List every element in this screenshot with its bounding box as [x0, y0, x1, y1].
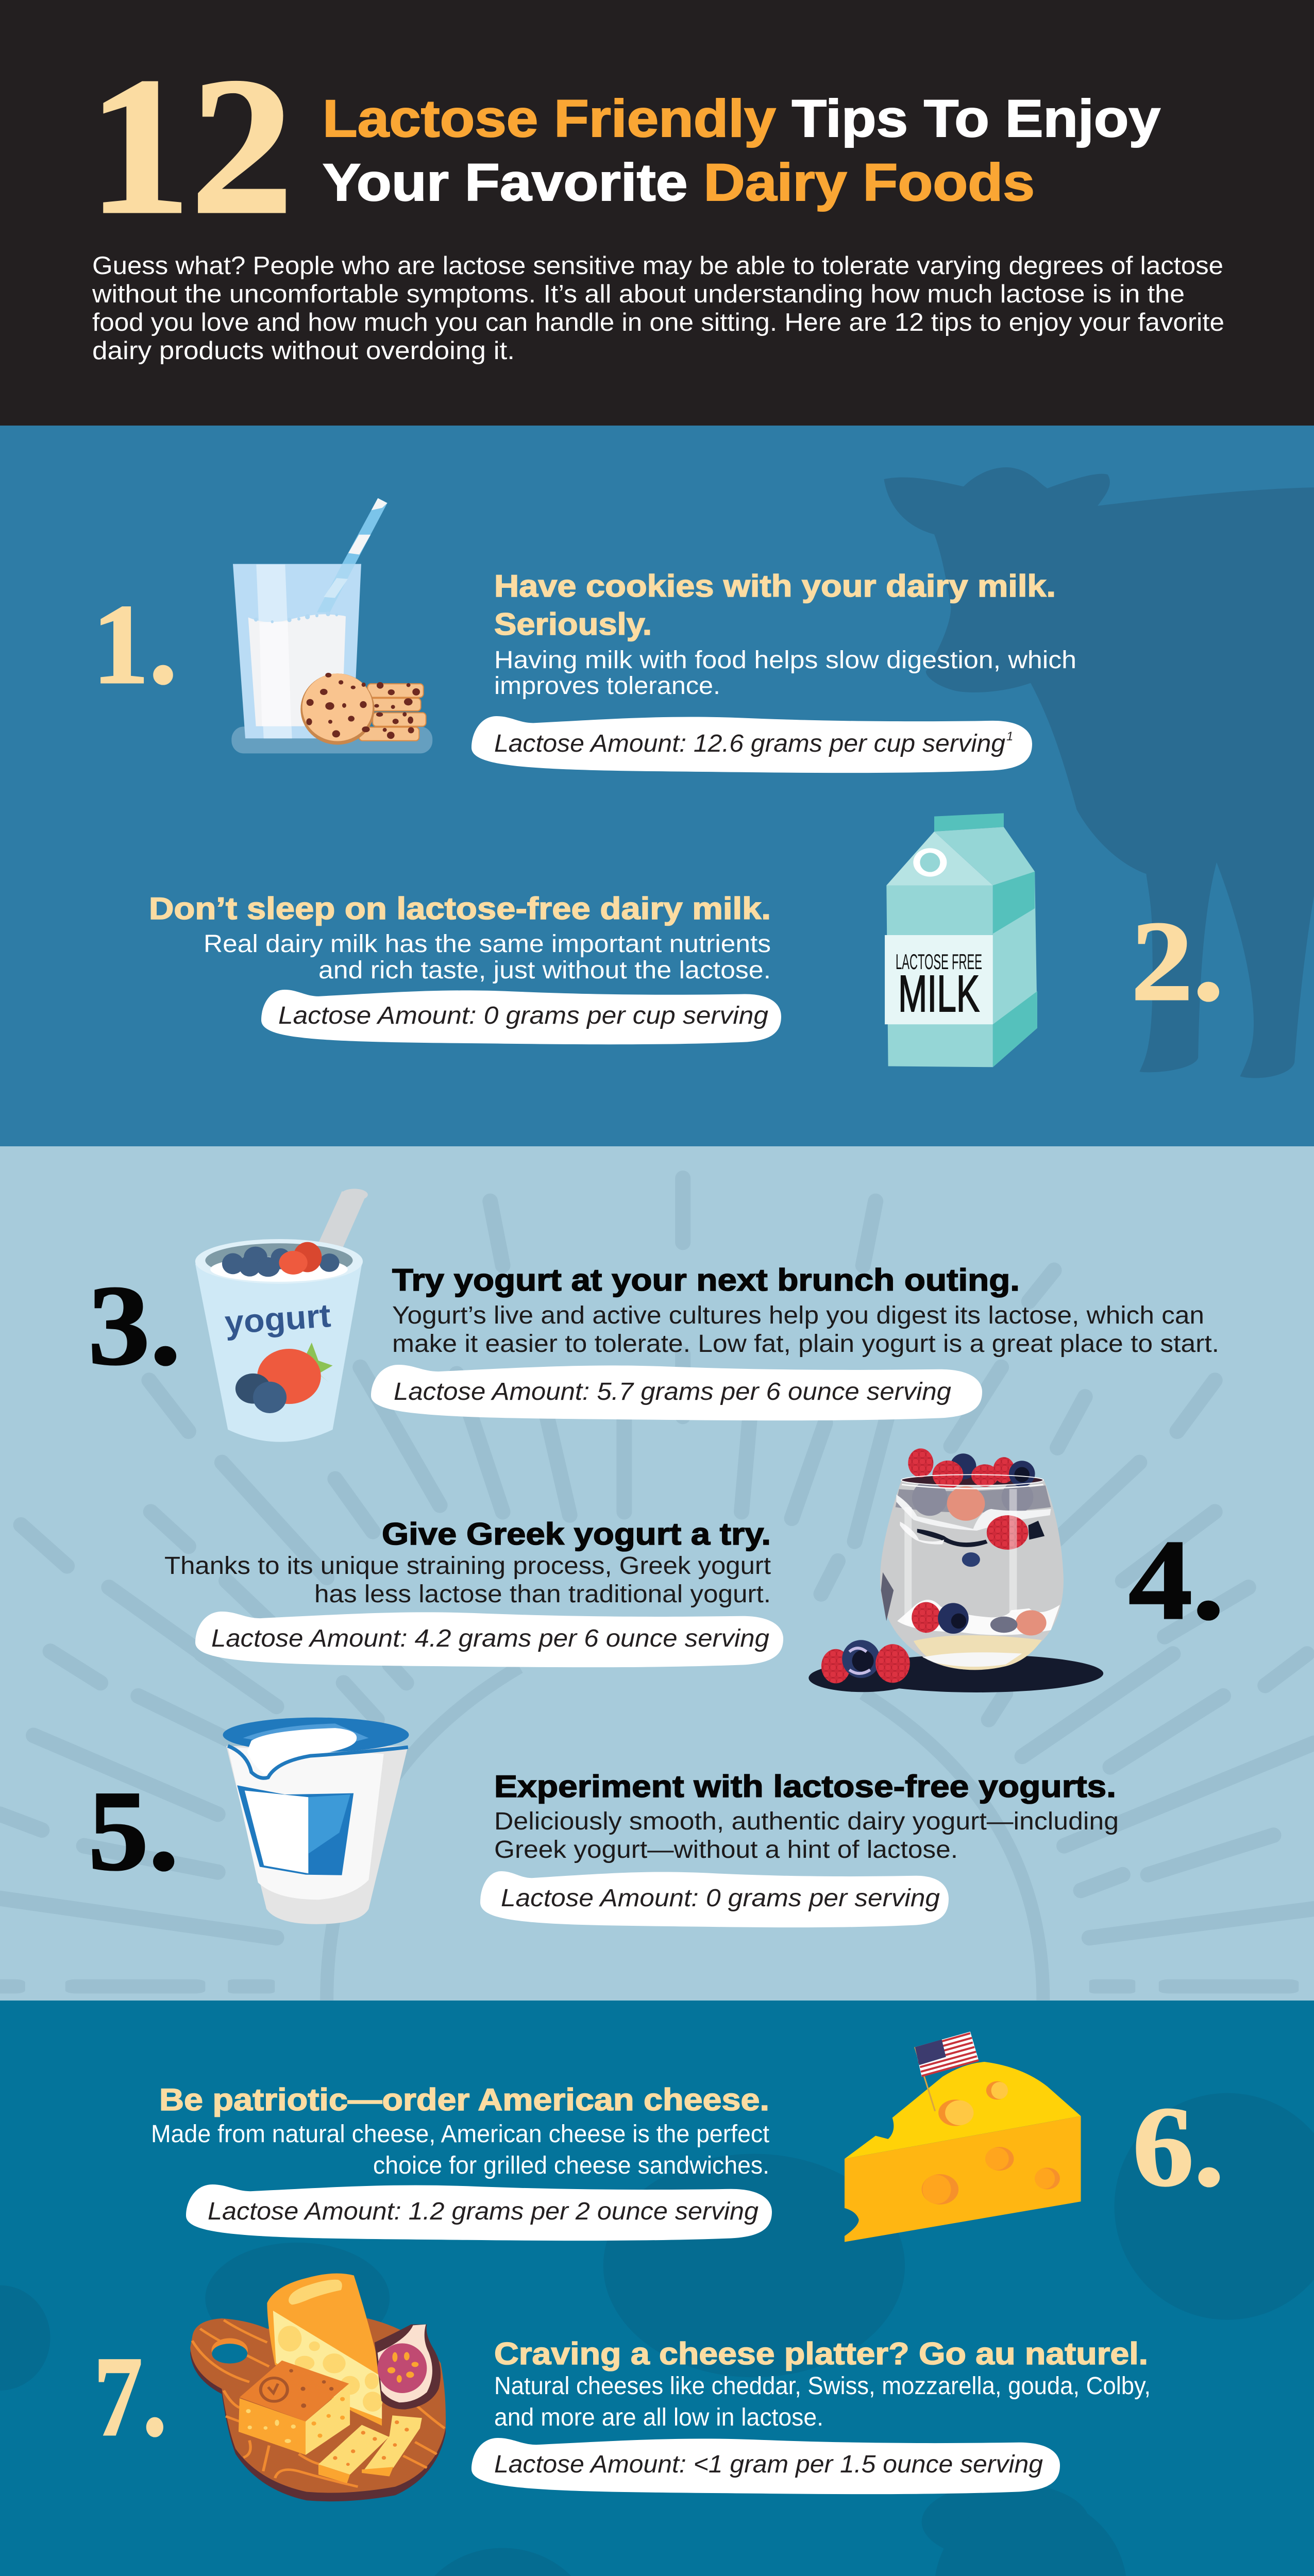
number 4: 4. [1128, 1517, 1224, 1643]
lactose amount pill: Lactose Amount: 5.7 grams per 6 ounce serving [394, 1378, 951, 1405]
icon: cheese board [190, 2274, 446, 2501]
tip 1 [92, 498, 1076, 773]
lactose amount pill: Lactose Amount: 4.2 grams per 6 ounce serving [211, 1625, 769, 1652]
icon: lactose free milk carton: LACTOSE FREE [896, 950, 982, 974]
panel: cheese [0, 2001, 1314, 2576]
lactose amount pill [471, 716, 1032, 773]
icon: yogurt cup with berries: yogurt [224, 1297, 332, 1341]
icon: lactose free milk carton: MILK [898, 965, 980, 1023]
panel: milk [0, 426, 1314, 1146]
lactose amount pill: Lactose Amount: 1.2 grams per 2 ounce serving [208, 2198, 759, 2225]
panel: yogurt [0, 1146, 1314, 2001]
number 3: 3. [88, 1262, 181, 1389]
icon: cheese wedge with flag [845, 2031, 1081, 2242]
heading: Seriously. [494, 607, 652, 641]
body text [204, 930, 771, 984]
body text: Thanks to its unique straining process, Greek yogurt [164, 1552, 771, 1580]
intro text: Guess what? People who are lactose sensitive may be able to tolerate varying degrees of lactose [92, 252, 1223, 280]
lactose amount pill [371, 1365, 982, 1420]
body text [494, 647, 1076, 700]
heading: Craving a cheese platter? Go au naturel. [494, 2336, 1148, 2371]
icon: lactose free milk carton [885, 813, 1037, 1067]
number 1: 1. [92, 581, 177, 708]
tip 2 [149, 813, 1224, 1067]
heading: Have cookies with your dairy milk. [494, 569, 1056, 603]
body text: Greek yogurt—without a hint of lactose. [494, 1836, 958, 1863]
body text: Having milk with food helps slow digestion, which [494, 647, 1076, 674]
icon: lactose free yogurt tub [223, 1718, 409, 1924]
title [323, 89, 1160, 212]
tip 3 [88, 1189, 1219, 1442]
heading: Try yogurt at your next brunch outing. [392, 1263, 1020, 1297]
number 2: 2. [1131, 898, 1224, 1025]
body text: and rich taste, just without the lactose. [318, 957, 771, 984]
icon: greek yogurt parfait [808, 1448, 1103, 1692]
body text: Real dairy milk has the same important nutrients [204, 930, 771, 958]
body text: has less lactose than traditional yogurt. [314, 1581, 771, 1608]
intro text: dairy products without overdoing it. [92, 337, 515, 365]
tip 4 [164, 1448, 1224, 1692]
lactose amount pill [186, 2184, 772, 2241]
body text: and more are all low in lactose. [494, 2404, 823, 2431]
lactose amount pill [471, 2438, 1060, 2494]
number 6: 6. [1133, 2083, 1224, 2210]
title: Your Favorite Dairy Foods [323, 153, 1035, 212]
lactose amount pill: 1 [1006, 730, 1013, 743]
big number 12: 12 [88, 38, 293, 255]
body text [494, 1808, 1119, 1863]
body text: improves tolerance. [494, 672, 720, 700]
panel: header [0, 0, 1314, 426]
heading [494, 569, 1056, 641]
body text [164, 1552, 771, 1608]
lactose amount pill: Lactose Amount: 0 grams per cup serving [278, 1002, 768, 1029]
lactose amount pill [480, 1871, 949, 1927]
lactose amount pill: Lactose Amount: 0 grams per serving [501, 1885, 940, 1912]
number 7: 7. [94, 2333, 167, 2460]
intro text: without the uncomfortable symptoms. It’s all about understanding how much lactose is in the [92, 280, 1185, 308]
tip 5 [88, 1718, 1119, 1927]
body text: Made from natural cheese, American cheese is the perfect [151, 2121, 769, 2148]
heading: Experiment with lactose-free yogurts. [494, 1769, 1116, 1804]
title: Lactose Friendly Tips To Enjoy [323, 89, 1160, 148]
lactose amount pill [195, 1612, 783, 1667]
tip 6 [151, 2031, 1224, 2242]
body text: Deliciously smooth, authentic dairy yogurt—including [494, 1808, 1119, 1835]
body text [494, 2372, 1151, 2431]
heading: Don’t sleep on lactose-free dairy milk. [149, 891, 771, 926]
lactose amount pill: Lactose Amount: <1 gram per 1.5 ounce serving [494, 2451, 1043, 2478]
icon: yogurt cup with berries [195, 1189, 368, 1442]
body text [392, 1302, 1219, 1358]
body text: Yogurt’s live and active cultures help you digest its lactose, which can [392, 1302, 1204, 1329]
body text: make it easier to tolerate. Low fat, plain yogurt is a great place to start. [392, 1330, 1219, 1358]
lactose amount pill: Lactose Amount: 12.6 grams per cup serving [494, 730, 1005, 757]
body text: Natural cheeses like cheddar, Swiss, mozzarella, gouda, Colby, [494, 2372, 1151, 2400]
icon: glass of milk with cookies [231, 498, 432, 753]
lactose amount pill [261, 990, 781, 1044]
cow silhouette [884, 467, 1314, 1078]
number 5: 5. [88, 1768, 179, 1894]
intro text [92, 252, 1224, 365]
heading: Give Greek yogurt a try. [382, 1517, 771, 1551]
heading: Be patriotic—order American cheese. [159, 2082, 769, 2117]
tip 7 [94, 2274, 1151, 2501]
body text: choice for grilled cheese sandwiches. [373, 2152, 769, 2179]
body text [151, 2121, 769, 2179]
intro text: food you love and how much you can handle in one sitting. Here are 12 tips to enjoy your favorite [92, 309, 1224, 336]
